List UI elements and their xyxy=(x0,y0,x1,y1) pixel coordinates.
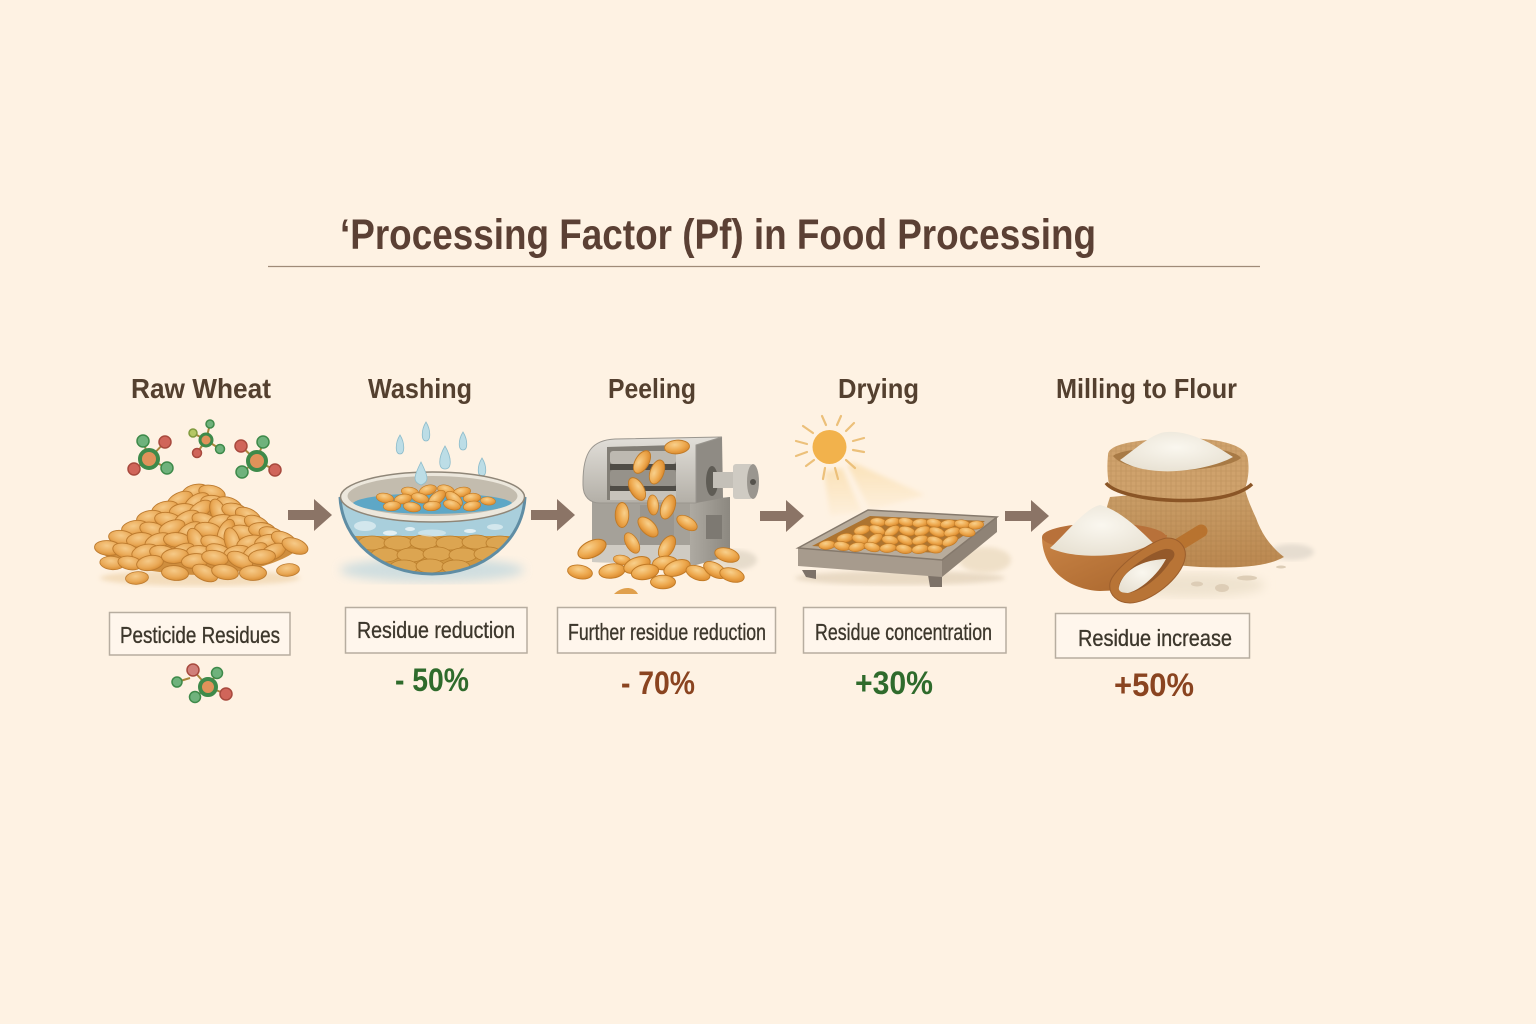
arrow: drying to milling xyxy=(1005,500,1049,532)
icon: residue molecule xyxy=(172,664,232,702)
panel: raw wheat xyxy=(94,373,310,702)
label box: pesticide residues: Pesticide Residues xyxy=(120,622,280,648)
heading: milling to flour: Milling to Flour xyxy=(1056,373,1237,404)
heading: peeling: Peeling xyxy=(608,373,696,404)
icon: water drops xyxy=(396,422,486,476)
heading: washing: Washing xyxy=(368,373,472,404)
label box: residue reduction xyxy=(346,608,527,653)
sack neck xyxy=(1107,438,1249,501)
panel: drying xyxy=(795,373,1011,701)
sack body xyxy=(1103,485,1284,567)
value: minus 50 percent: - 50% xyxy=(395,662,469,698)
label box: residue increase: Residue increase xyxy=(1078,625,1232,651)
arrow: washing to peeling xyxy=(531,499,575,531)
value: plus 50 percent: +50% xyxy=(1114,667,1194,703)
label box: residue concentration xyxy=(804,608,1006,653)
heading: raw wheat: Raw Wheat xyxy=(131,373,271,404)
icon: sun with beams xyxy=(796,416,925,516)
wooden bowl xyxy=(1042,535,1167,591)
label box: further residue reduction: Further residue reduction xyxy=(568,619,766,645)
icon: pesticide molecules xyxy=(128,420,281,478)
heading: drying: Drying xyxy=(838,373,919,404)
illustration: drying tray with grains xyxy=(795,510,1011,587)
title: ‘Processing Factor (Pf) in Food Processing xyxy=(340,211,1096,259)
infographic canvas xyxy=(94,218,1314,704)
wooden scoop xyxy=(1175,531,1201,547)
label box: residue reduction: Residue reduction xyxy=(357,617,515,643)
panel: washing xyxy=(335,373,535,698)
panel: peeling xyxy=(558,373,776,701)
illustration: wheat grain pile xyxy=(94,481,310,586)
illustration: peeling machine with grains xyxy=(567,437,759,594)
label box: further residue reduction xyxy=(558,608,776,653)
arrow: peeling to drying xyxy=(760,500,804,532)
illustration: bowl of water with grain xyxy=(335,462,535,582)
label box: residue concentration: Residue concentration xyxy=(815,619,992,645)
panel: milling to flour xyxy=(1042,373,1314,703)
value: minus 70 percent: - 70% xyxy=(621,665,695,701)
arrow: raw wheat to washing xyxy=(288,499,332,531)
label box: residue increase xyxy=(1056,614,1250,658)
label box: pesticide residues xyxy=(110,612,290,655)
illustration: flour sack, bowl and scoop xyxy=(1042,432,1314,603)
value: plus 30 percent: +30% xyxy=(855,665,933,701)
